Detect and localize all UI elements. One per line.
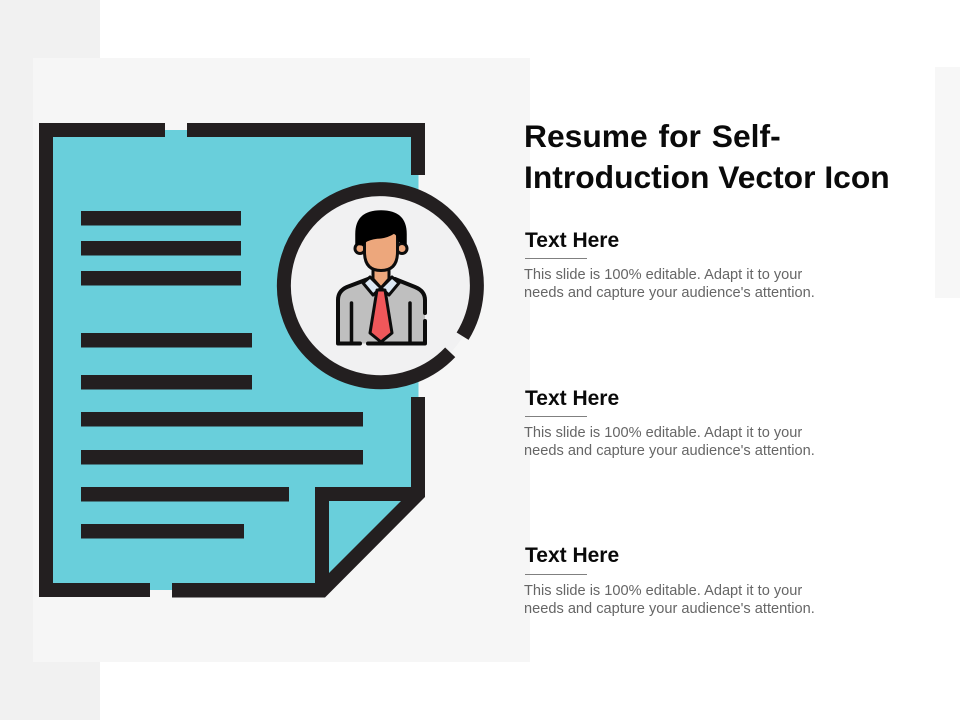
divider 3 — [525, 574, 587, 575]
right background strip — [935, 67, 960, 298]
heading 1: Text Here — [525, 229, 619, 252]
document page — [39, 123, 425, 598]
text block 3 — [524, 544, 815, 617]
icon backing panel — [33, 58, 530, 662]
title — [524, 118, 890, 195]
folded corner — [329, 501, 401, 573]
text lines — [81, 211, 363, 538]
heading 3: Text Here — [525, 544, 619, 567]
body 2 — [524, 425, 815, 459]
left background strip — [0, 0, 100, 720]
face — [364, 232, 398, 270]
body 3 — [524, 583, 815, 617]
title: Resume for Self- — [524, 118, 781, 154]
collar — [363, 277, 399, 295]
body 1: This slide is 100% editable. Adapt it to your — [524, 267, 802, 283]
divider 1 — [525, 258, 587, 259]
person avatar — [338, 211, 425, 344]
body 3: needs and capture your audience's attention. — [524, 601, 815, 617]
title: Introduction Vector Icon — [524, 159, 890, 195]
body 3: This slide is 100% editable. Adapt it to your — [524, 583, 802, 599]
neck — [373, 266, 389, 288]
body 2: This slide is 100% editable. Adapt it to your — [524, 425, 802, 441]
jacket — [338, 278, 425, 344]
body 1 — [524, 267, 815, 301]
tie — [370, 290, 392, 342]
text block 1 — [524, 229, 815, 301]
text block 2 — [524, 387, 815, 459]
heading 2: Text Here — [525, 387, 619, 410]
body 2: needs and capture your audience's attention. — [524, 443, 815, 459]
divider 2 — [525, 416, 587, 417]
body 1: needs and capture your audience's attention. — [524, 285, 815, 301]
hair — [356, 211, 406, 245]
ears — [355, 244, 365, 254]
profile circle — [284, 188, 478, 382]
